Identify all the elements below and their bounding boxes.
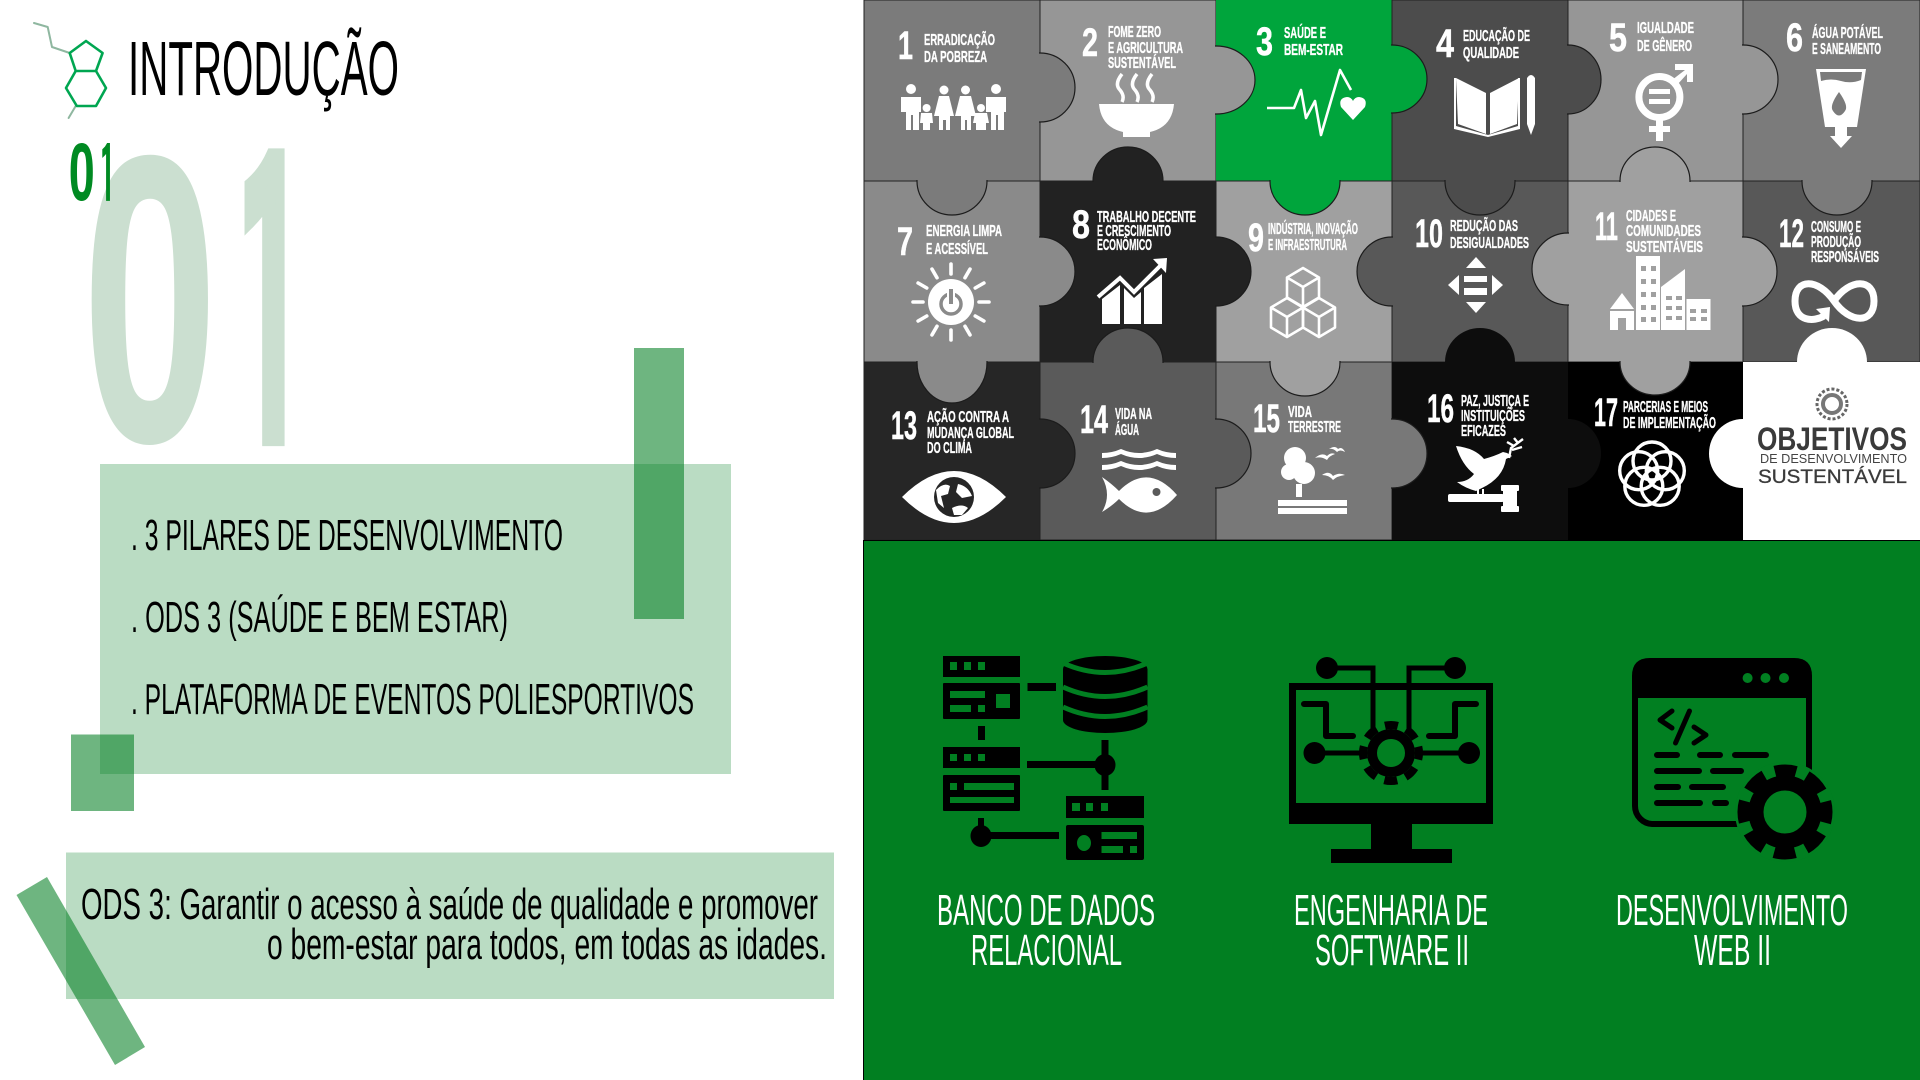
tile 7: E ACESSÍVEL: [926, 239, 988, 258]
tile 4: QUALIDADE: [1463, 45, 1519, 62]
tile 2: E AGRICULTURA: [1108, 40, 1183, 57]
tile 10: DESIGUALDADES: [1450, 235, 1529, 252]
accent block: square: [71, 734, 134, 811]
panel: topics: [100, 464, 731, 774]
puzzle tiles: [864, 0, 1920, 540]
icon: inequality arrows: [1448, 257, 1503, 313]
tile 15: 15: [1253, 397, 1280, 441]
icon: rings: [1620, 442, 1684, 505]
icon: waves and fish: [1102, 449, 1177, 513]
tile 11: [1595, 205, 1710, 330]
panel: ODS 3 description: [66, 852, 834, 999]
text: 1: [98, 134, 116, 214]
tile 7: 7: [897, 220, 913, 264]
tile 14: ÁGUA: [1115, 420, 1139, 439]
icon: growth chart: [1098, 258, 1167, 324]
tile 2: 2: [1082, 21, 1098, 65]
tile 9: 9: [1248, 216, 1264, 260]
tile 3: SAÚDE E: [1284, 23, 1326, 42]
tile 11: CIDADES E: [1626, 208, 1676, 225]
tile 8: [1072, 203, 1196, 324]
tile 4: EDUCAÇÃO DE: [1463, 25, 1530, 45]
tile 12: PRODUÇÃO: [1811, 231, 1861, 251]
tile 13: [891, 404, 1014, 523]
label: desenvolvimento web: [1616, 886, 1848, 975]
tile 12: CONSUMO E: [1811, 219, 1861, 236]
title: INTRODUÇÃO: [128, 26, 399, 112]
big section number watermark: 0: [82, 70, 218, 528]
tile 3: BEM-ESTAR: [1284, 42, 1343, 59]
icon: gender equality: [1639, 64, 1693, 141]
tile 1: ERRADICAÇÃO: [924, 29, 995, 49]
tile 2: SUSTENTÁVEL: [1108, 53, 1176, 72]
panel: subjects: [864, 540, 1920, 1080]
tile 3: [1256, 20, 1366, 135]
tile 4: [1436, 22, 1535, 137]
label: banco de dados: BANCO DE DADOS: [937, 886, 1155, 935]
tile: SDG logo: SUSTENTÁVEL: [1758, 467, 1907, 488]
icon: water glass: [1816, 69, 1866, 148]
text: topic 2: . ODS 3 (SAÚDE E BEM ESTAR): [131, 593, 508, 642]
label: engenharia de software: [1294, 886, 1488, 975]
tile 15: [1253, 397, 1347, 514]
tile 11: SUSTENTÁVEIS: [1626, 237, 1703, 256]
label: engenharia de software: ENGENHARIA DE: [1294, 886, 1488, 935]
icon: heartbeat: [1267, 70, 1366, 135]
tile 13: 13: [891, 404, 917, 448]
panel: SDG puzzle: INDÚSTRIA, INOVAÇÃO: [1268, 218, 1358, 238]
tile 13: MUDANÇA GLOBAL: [927, 425, 1014, 442]
tile 4: 4: [1436, 22, 1455, 66]
tile 5: IGUALDADE: [1637, 20, 1694, 37]
tile 16: 16: [1427, 387, 1454, 431]
icon: database: [943, 656, 1148, 860]
text: description line 1: ODS 3: Garantir o acesso à saúde de qualidade e promover: [81, 880, 818, 929]
tile 17: 17: [1594, 391, 1618, 435]
icon: book and pencil: [1454, 75, 1535, 137]
tile 6: 6: [1786, 16, 1803, 60]
icon: sun power: [913, 264, 989, 340]
icon: tree and birds: [1278, 447, 1347, 514]
icon: molecule: [34, 23, 106, 118]
tile 3: 3: [1256, 20, 1273, 64]
icon: UN emblem: [1817, 389, 1847, 419]
tile 16: [1427, 387, 1529, 512]
tile 17: PARCERIAS E MEIOS: [1623, 399, 1708, 416]
tile 16: PAZ, JUSTIÇA E: [1461, 393, 1529, 410]
tile 1: 1: [898, 24, 913, 68]
tile 14: [1080, 398, 1177, 513]
icon: eye globe: [902, 471, 1006, 523]
icon: family: [901, 84, 1006, 130]
tile 11: 11: [1595, 205, 1618, 249]
icon: web development: [1632, 658, 1835, 862]
tile 12: [1779, 212, 1879, 322]
tile 14: VIDA NA: [1115, 406, 1152, 423]
tile 13: AÇÃO CONTRA A: [927, 406, 1009, 426]
tile 11: COMUNIDADES: [1626, 223, 1701, 240]
tile 16: EFICAZES: [1461, 423, 1506, 440]
text: topic 1: . 3 PILARES DE DESENVOLVIMENTO: [131, 511, 563, 560]
accent bar: tilted: [16, 877, 145, 1065]
tile 10: REDUÇÃO DAS: [1450, 215, 1518, 235]
label: banco de dados: RELACIONAL: [971, 926, 1122, 975]
tile 12: 12: [1779, 212, 1804, 256]
tile: SDG logo: DE DESENVOLVIMENTO: [1760, 451, 1907, 466]
tile 8: E CRESCIMENTO: [1097, 223, 1171, 240]
tile: SDG logo: [1757, 389, 1907, 488]
label: desenvolvimento web: WEB II: [1694, 926, 1771, 975]
accent bar: vertical: [634, 348, 684, 619]
tile 17: [1594, 391, 1716, 505]
tile 1: DA POBREZA: [924, 49, 987, 66]
tile 8: ECONÔMICO: [1097, 235, 1152, 254]
tile 5: 5: [1609, 16, 1627, 60]
tile 14: 14: [1080, 398, 1108, 442]
tile 9: E INFRAESTRUTURA: [1268, 237, 1347, 254]
tile 17: DE IMPLEMENTAÇÃO: [1623, 412, 1716, 432]
icon: software engineering: [1289, 657, 1493, 863]
tile 13: DO CLIMA: [927, 440, 972, 457]
icon: city: [1610, 256, 1710, 330]
tile 9: [1248, 216, 1358, 337]
tile 7: ENERGIA LIMPA: [926, 223, 1002, 240]
icon: bowl: [1099, 74, 1174, 137]
tile 16: INSTITUIÇÕES: [1461, 405, 1525, 425]
text: 1: [229, 108, 313, 504]
icon: infinity: [1795, 284, 1874, 322]
puzzle connectors: [917, 45, 1872, 488]
tile 8: 8: [1072, 203, 1090, 247]
tile 15: TERRESTRE: [1288, 419, 1341, 436]
tile 10: 10: [1415, 212, 1443, 256]
icon: dove and gavel: [1448, 438, 1523, 512]
icon: cubes: [1271, 268, 1335, 337]
tile 5: DE GÊNERO: [1637, 36, 1692, 55]
text: description line 2: o bem-estar para todos, em todas as idades.: [267, 920, 827, 969]
tile 5: [1609, 16, 1694, 141]
tile 8: TRABALHO DECENTE: [1097, 209, 1196, 226]
panel: SDG puzzle: [864, 0, 1920, 540]
label: banco de dados: [937, 886, 1155, 975]
tile 2: [1082, 21, 1183, 137]
tile 6: [1786, 16, 1883, 148]
tile 10: [1415, 212, 1529, 313]
tile 7: [897, 220, 1002, 340]
small section number: 0: [69, 127, 95, 218]
text: topic 3: . PLATAFORMA DE EVENTOS POLIESPORTIVOS: [131, 675, 694, 724]
tile 15: VIDA: [1288, 404, 1312, 421]
tile 1: [898, 24, 1006, 130]
tile 2: FOME ZERO: [1108, 24, 1161, 41]
label: engenharia de software: SOFTWARE II: [1315, 926, 1469, 975]
